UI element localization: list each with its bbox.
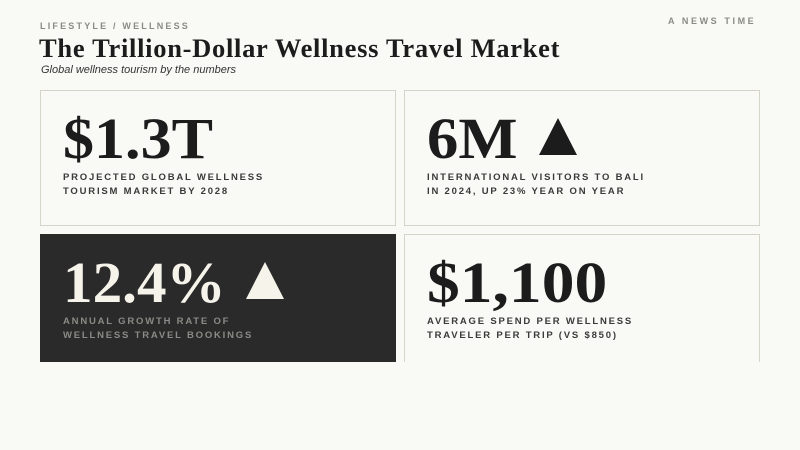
label: growth <box>63 316 253 341</box>
kicker: LIFESTYLE / WELLNESS <box>40 21 190 31</box>
panel: average spend <box>404 234 760 374</box>
label: spend: TRAVELER PER TRIP (VS $850) <box>427 330 618 341</box>
subtitle: Global wellness tourism by the numbers <box>41 64 236 76</box>
label: visitors: IN 2024, UP 23% YEAR ON YEAR <box>427 186 625 197</box>
label: market <box>63 172 264 197</box>
label: spend: AVERAGE SPEND PER WELLNESS <box>427 316 633 327</box>
panel: bali visitors <box>404 90 760 226</box>
title: The Trillion-Dollar Wellness Travel Market <box>39 33 560 63</box>
stat: $1,100: $1,100 <box>427 250 607 315</box>
label: market: TOURISM MARKET BY 2028 <box>63 186 229 197</box>
brand: A NEWS TIME <box>668 16 756 26</box>
label: growth: ANNUAL GROWTH RATE OF <box>63 316 230 327</box>
stat: 12.4%: 12.4% <box>63 250 226 315</box>
icon: up triangle light <box>246 262 284 299</box>
icon: up triangle <box>539 118 577 155</box>
label: visitors: INTERNATIONAL VISITORS TO BALI <box>427 172 645 183</box>
stat: 6M: 6M <box>427 106 517 171</box>
panel: growth rate (dark) <box>40 234 396 362</box>
label: growth: WELLNESS TRAVEL BOOKINGS <box>63 330 253 341</box>
label: spend <box>427 316 633 341</box>
stat: $1.3T: $1.3T <box>63 106 213 171</box>
label: market: PROJECTED GLOBAL WELLNESS <box>63 172 264 183</box>
panel: market size <box>40 90 396 226</box>
label: visitors <box>427 172 645 197</box>
